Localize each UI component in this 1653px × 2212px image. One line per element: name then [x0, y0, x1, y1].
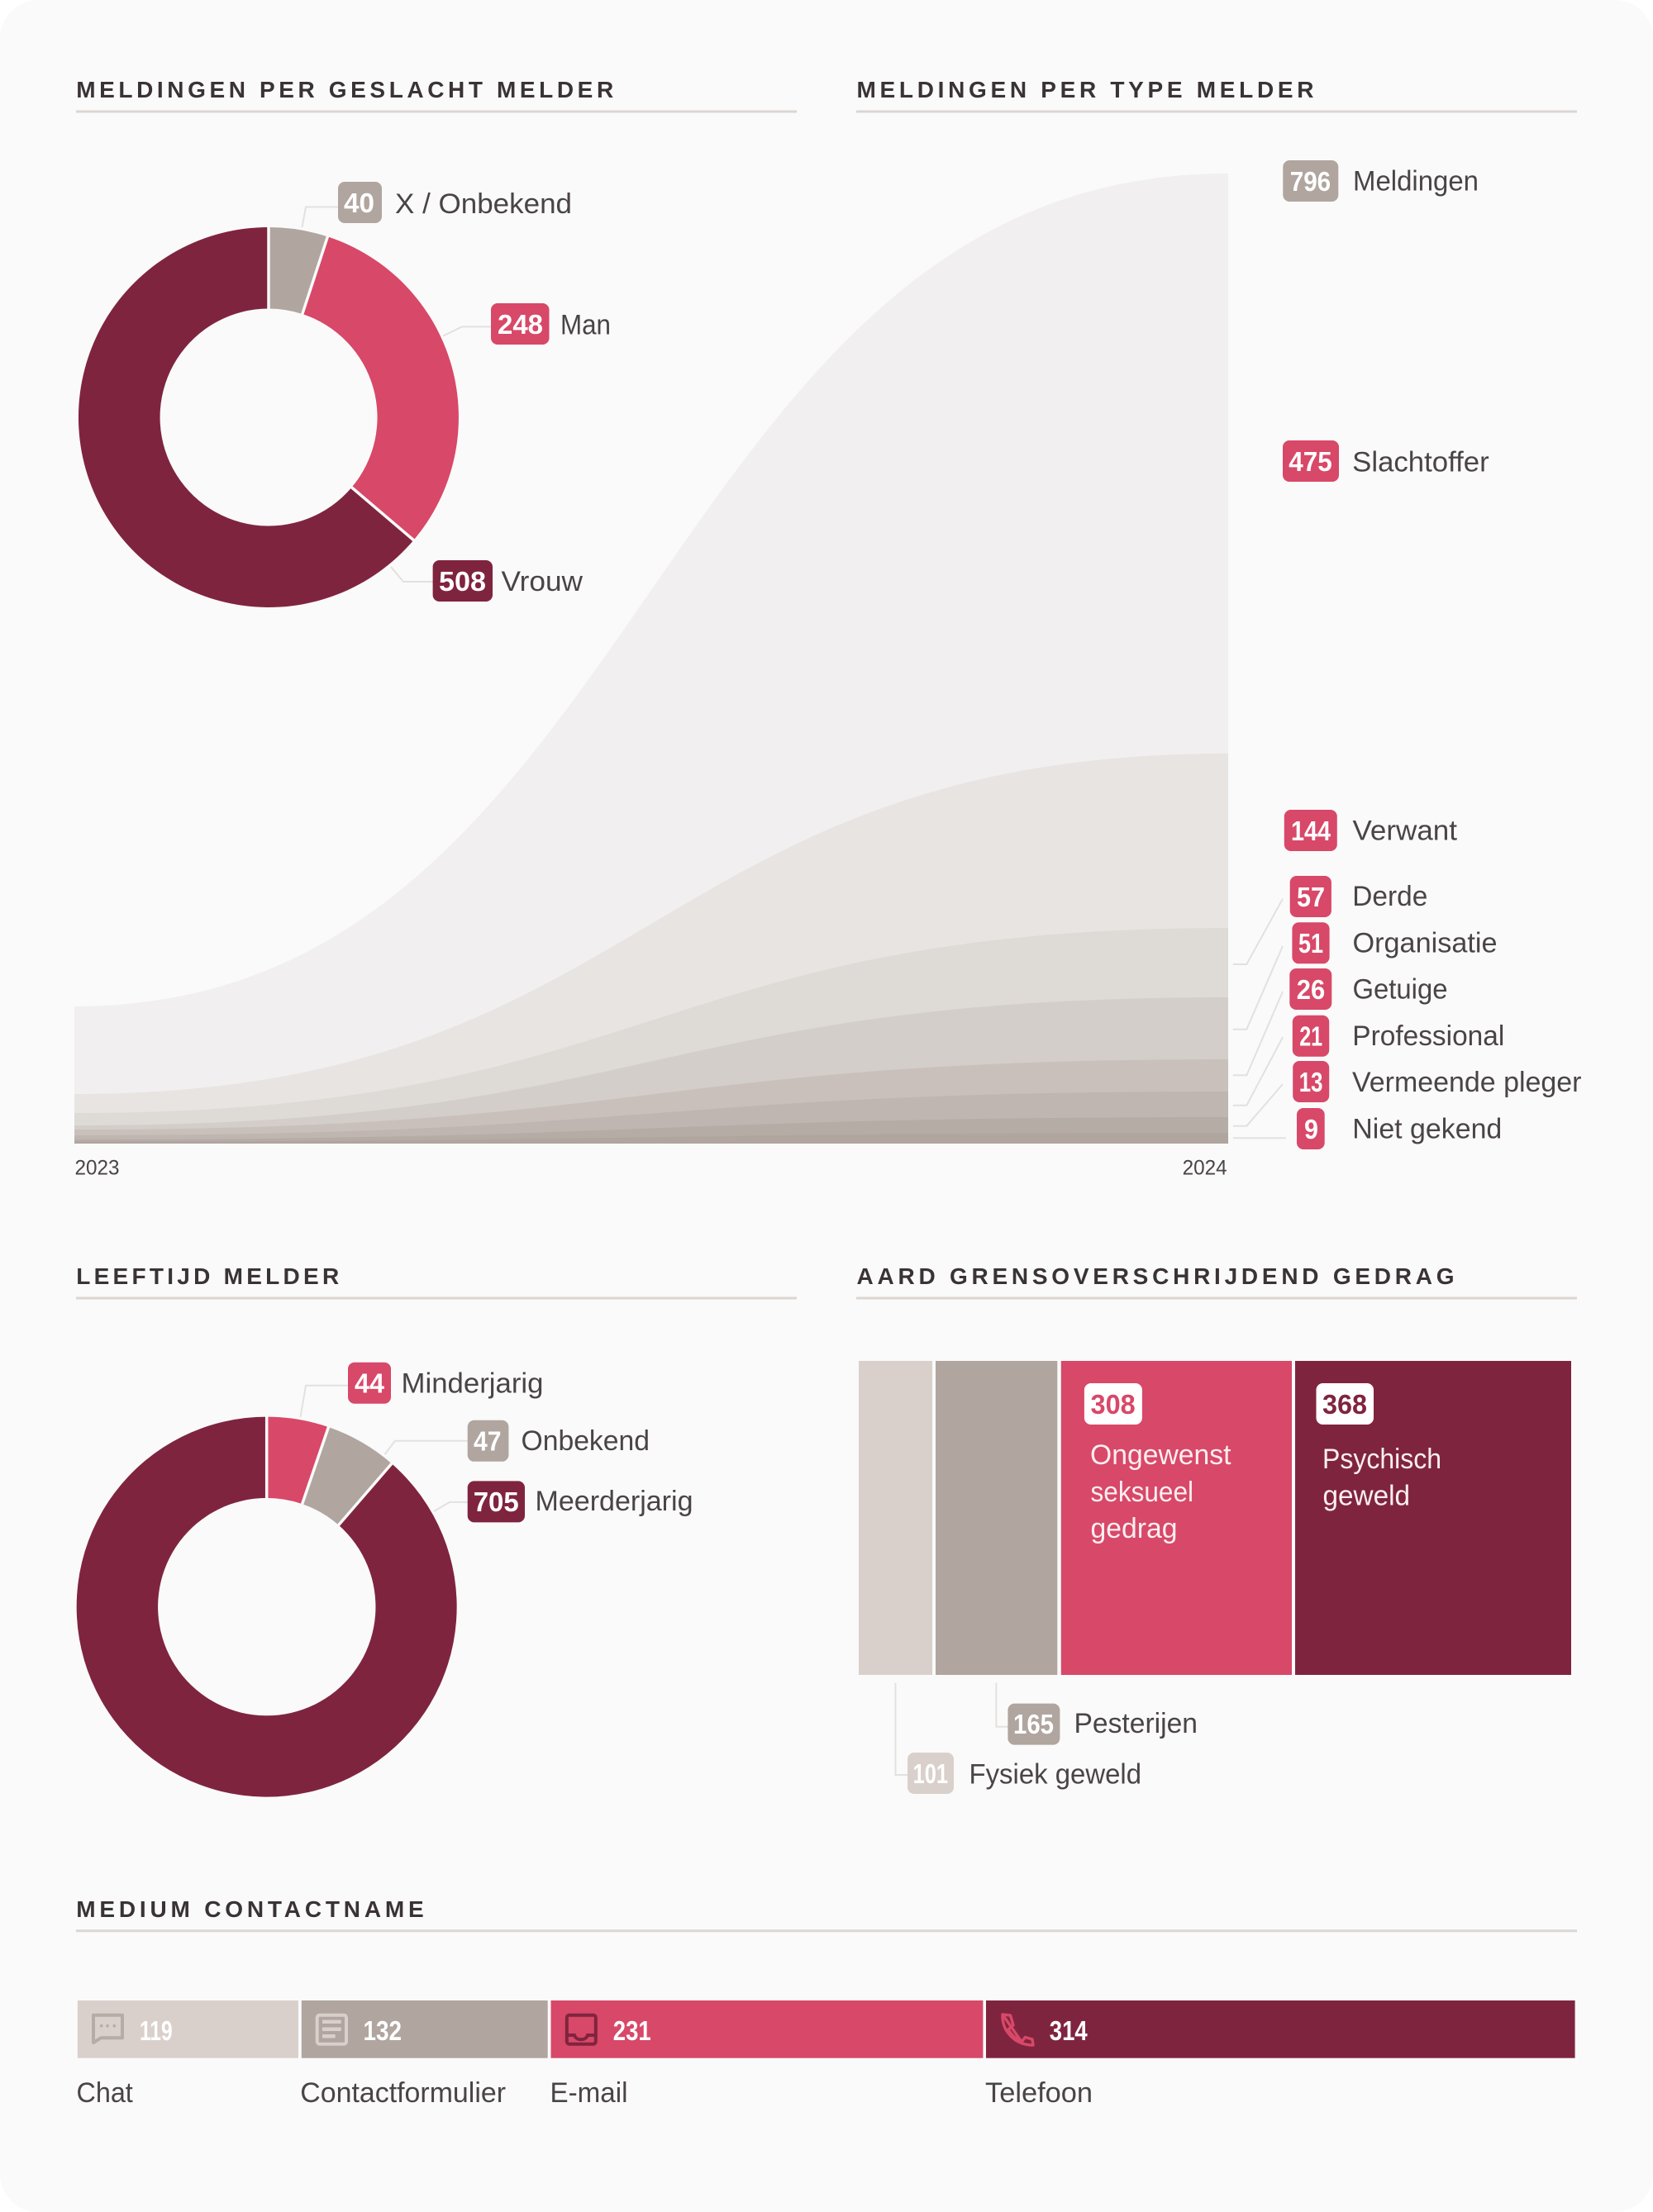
label: 51 Organisatie: Organisatie — [1352, 928, 1498, 959]
axis label: 2024: 2024 — [1183, 1157, 1227, 1180]
treemap block: psychisch geweld: geweld — [1322, 1480, 1410, 1511]
heading: aard gedrag — [856, 1263, 1577, 1299]
label: 13 Vermeende pleger: 13 — [1299, 1067, 1322, 1097]
treemap block: pesterijen — [936, 1361, 1057, 1675]
label: 57 Derde — [1233, 876, 1427, 964]
bar segment: e-mail — [550, 2000, 983, 2058]
icon: telephone — [1003, 2015, 1033, 2045]
panel: medium contactname — [76, 1896, 1577, 2109]
bar segment: telefoon: 314 — [1050, 2015, 1088, 2046]
bar segment: chat — [78, 2000, 298, 2058]
stacked area chart — [74, 174, 1228, 1144]
label: 44 Minderjarig — [301, 1363, 544, 1417]
heading: leeftijd melder: LEEFTIJD MELDER — [76, 1263, 339, 1289]
label: 40 X / Onbekend: X / Onbekend — [395, 188, 572, 220]
label: 47 Onbekend — [385, 1420, 650, 1462]
axis label: 2023: 2023 — [74, 1157, 119, 1180]
heading: leeftijd melder — [76, 1263, 797, 1299]
label: 705 Meerderjarig: Meerderjarig — [536, 1486, 693, 1517]
bar segment: telefoon — [986, 2000, 1575, 2058]
label: 51 Organisatie: 51 — [1298, 928, 1323, 959]
label: e-mail: E-mail — [550, 2077, 628, 2109]
label: 796 Meldingen: Meldingen — [1353, 166, 1479, 197]
treemap block: ongewenst seksueel gedrag: seksueel — [1091, 1477, 1193, 1508]
label: 9 Niet gekend: 9 — [1304, 1114, 1318, 1144]
treemap block: ongewenst seksueel gedrag — [1061, 1361, 1292, 1675]
treemap block: fysiek geweld — [859, 1361, 932, 1675]
label: 44 Minderjarig: Minderjarig — [402, 1368, 544, 1400]
label: 165 Pesterijen: 165 — [1013, 1709, 1054, 1739]
label: telefoon: Telefoon — [985, 2077, 1093, 2109]
label: 475 Slachtoffer — [1283, 440, 1489, 482]
bar segment: contactformulier — [302, 2000, 548, 2058]
label: 101 Fysiek geweld: 101 — [913, 1758, 948, 1789]
heading: type melder: MELDINGEN PER TYPE MELDER — [856, 77, 1314, 102]
treemap block: ongewenst seksueel gedrag: gedrag — [1091, 1513, 1177, 1544]
heading: type melder — [856, 77, 1577, 112]
treemap block: psychisch geweld: Psychisch — [1322, 1444, 1441, 1475]
label: 165 Pesterijen — [996, 1683, 1198, 1745]
label: 248 Man — [443, 303, 611, 345]
heading: aard gedrag: AARD GRENSOVERSCHRIJDEND GEDRAG — [856, 1263, 1455, 1289]
treemap block: ongewenst seksueel gedrag: 308 — [1091, 1389, 1136, 1420]
label: 57 Derde: Derde — [1352, 881, 1427, 912]
label: 51 Organisatie — [1233, 922, 1498, 1030]
label: 44 Minderjarig: 44 — [355, 1368, 385, 1398]
panel: meldingen per type melder — [74, 77, 1582, 1180]
label: 47 Onbekend: Onbekend — [521, 1425, 650, 1457]
label: 475 Slachtoffer: 475 — [1289, 446, 1332, 477]
label: 26 Getuige — [1233, 968, 1448, 1075]
label: 508 Vrouw: 508 — [439, 566, 486, 597]
label: 21 Professional — [1233, 1016, 1504, 1106]
label: 705 Meerderjarig — [434, 1481, 693, 1522]
label: 47 Onbekend: 47 — [474, 1426, 501, 1456]
label: contactformulier: Contactformulier — [300, 2077, 506, 2109]
treemap block: psychisch geweld: 368 — [1322, 1389, 1367, 1420]
icon: form — [317, 2015, 346, 2044]
bar segment: chat: 119 — [140, 2015, 173, 2046]
donut chart: leeftijd — [77, 1416, 457, 1797]
bar segment: e-mail: 231 — [613, 2015, 651, 2046]
donut chart: geslacht — [79, 226, 459, 607]
bar segment: contactformulier: 132 — [364, 2015, 402, 2046]
label: 9 Niet gekend — [1233, 1108, 1502, 1149]
label: 26 Getuige: Getuige — [1352, 974, 1448, 1006]
label: 40 X / Onbekend — [302, 182, 572, 227]
panel: aard grensoverschrijdend gedrag — [856, 1263, 1577, 1794]
label: 796 Meldingen — [1283, 160, 1479, 202]
label: 13 Vermeende pleger: Vermeende pleger — [1352, 1067, 1582, 1098]
label: 13 Vermeende pleger — [1233, 1061, 1582, 1126]
treemap block: psychisch geweld — [1295, 1361, 1571, 1675]
label: 101 Fysiek geweld: Fysiek geweld — [969, 1758, 1141, 1790]
label: 144 Verwant: 144 — [1291, 816, 1331, 846]
label: 248 Man: Man — [560, 309, 611, 340]
panel: meldingen per geslacht melder — [76, 77, 797, 607]
label: 9 Niet gekend: Niet gekend — [1352, 1114, 1502, 1145]
label: 508 Vrouw — [391, 560, 583, 602]
label: 144 Verwant — [1284, 810, 1458, 851]
label: 21 Professional: 21 — [1299, 1021, 1322, 1051]
label: 508 Vrouw: Vrouw — [501, 566, 583, 597]
label: 40 X / Onbekend: 40 — [344, 188, 374, 218]
label: 705 Meerderjarig: 705 — [474, 1487, 519, 1517]
label: 144 Verwant: Verwant — [1352, 816, 1458, 847]
icon: chat bubble — [93, 2015, 122, 2043]
icon: inbox — [567, 2015, 596, 2044]
panel: leeftijd melder — [76, 1263, 797, 1797]
label: 21 Professional: Professional — [1352, 1020, 1504, 1052]
label: 57 Derde: 57 — [1297, 882, 1325, 912]
label: 248 Man: 248 — [498, 309, 543, 340]
label: chat: Chat — [76, 2077, 133, 2109]
label: 165 Pesterijen: Pesterijen — [1074, 1708, 1198, 1739]
treemap block: ongewenst seksueel gedrag: Ongewenst — [1090, 1439, 1231, 1471]
heading: geslacht melder — [76, 77, 797, 112]
label: 26 Getuige: 26 — [1297, 974, 1325, 1005]
label: 796 Meldingen: 796 — [1290, 166, 1331, 197]
label: 101 Fysiek geweld — [896, 1683, 1141, 1794]
heading: geslacht melder: MELDINGEN PER GESLACHT MELDER — [76, 77, 613, 102]
label: 475 Slachtoffer: Slachtoffer — [1352, 447, 1489, 478]
heading: medium contactname — [76, 1896, 1577, 1932]
heading: medium contactname: MEDIUM CONTACTNAME — [76, 1896, 424, 1922]
